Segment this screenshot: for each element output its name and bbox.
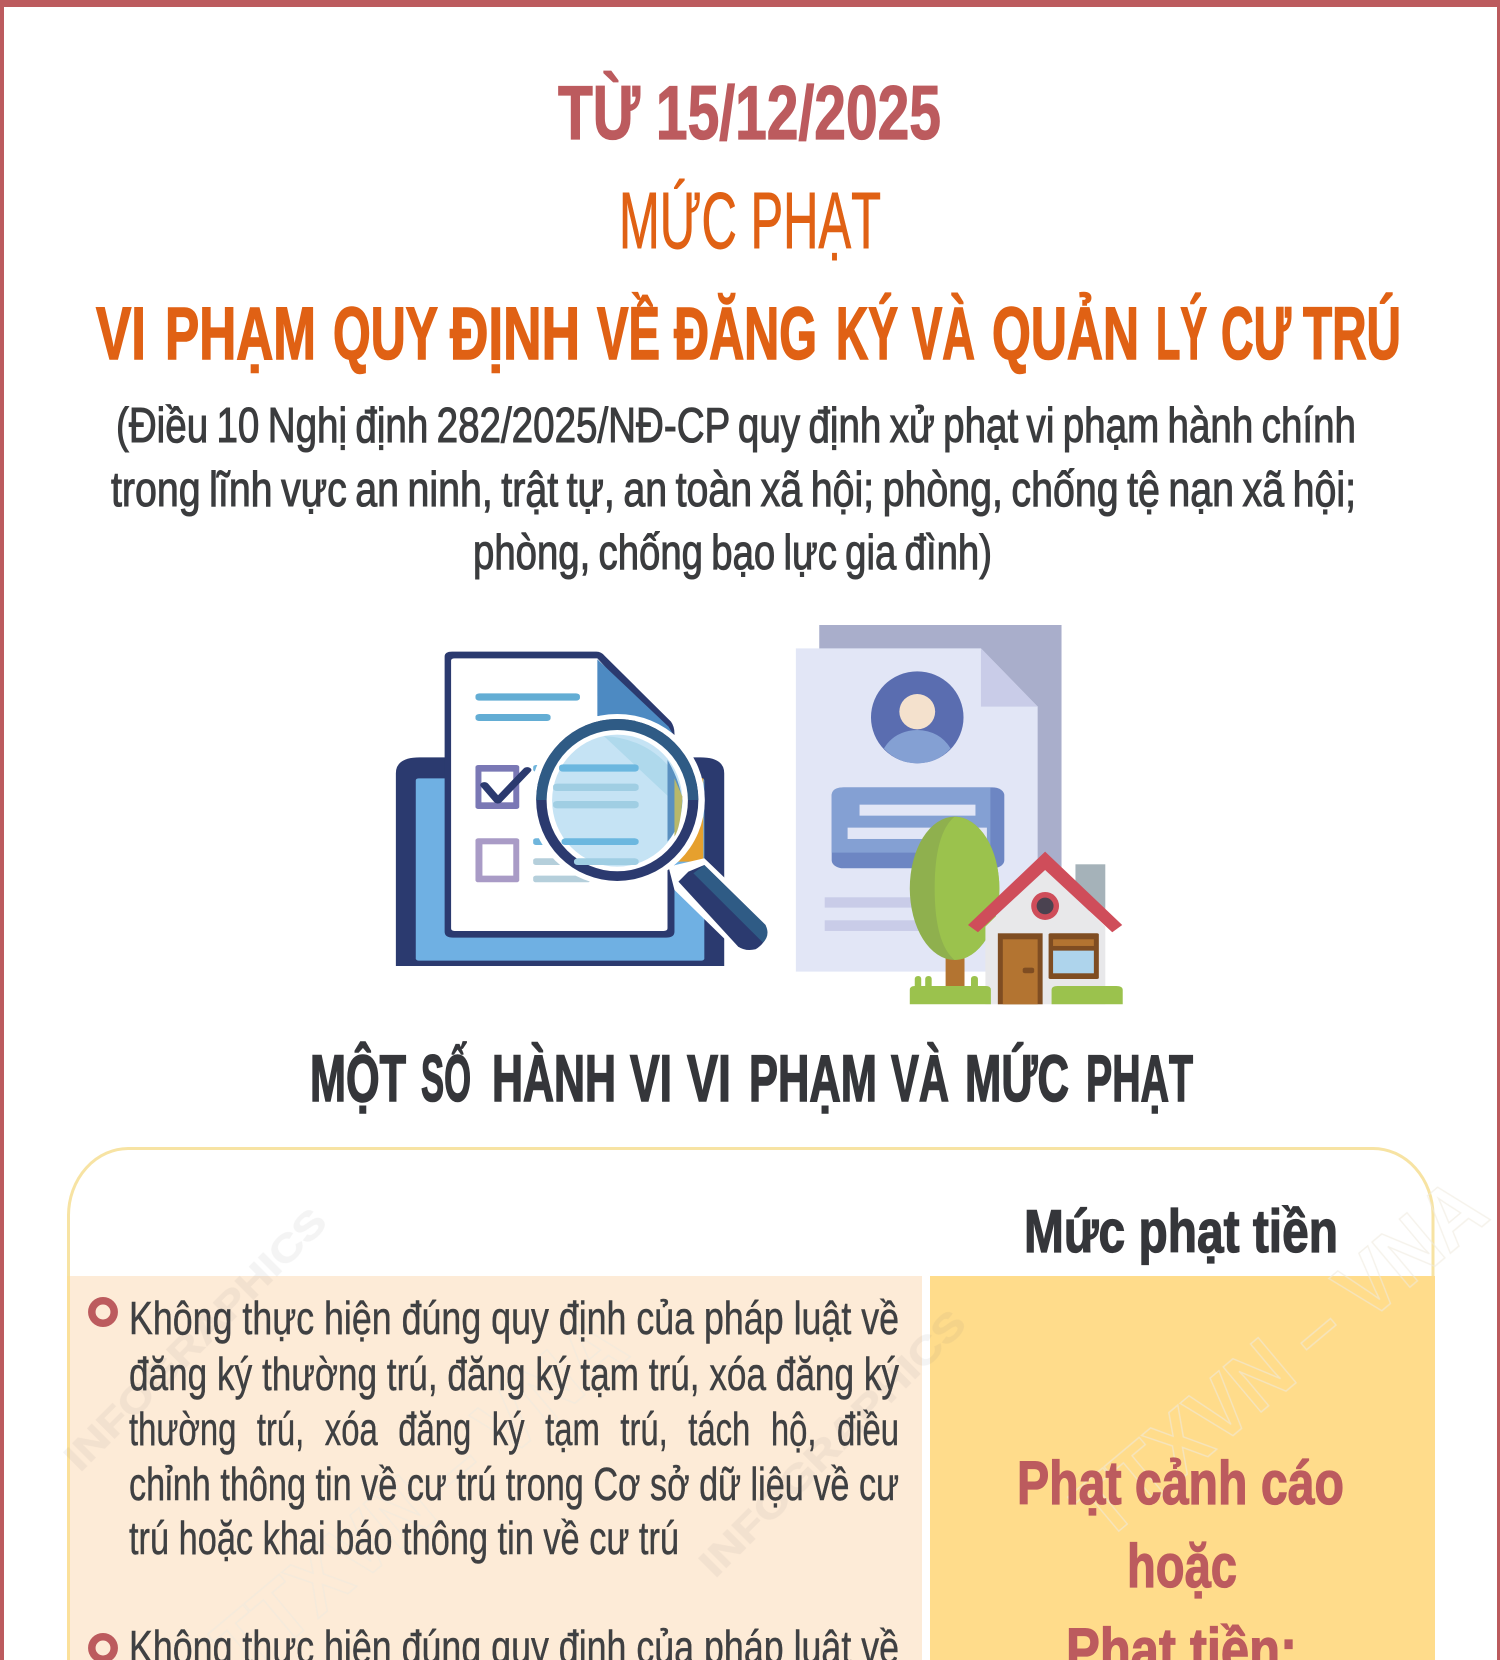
panel: violations and penalties table (57, 1148, 1500, 1660)
watermark: INFOGRAPHICS (692, 1303, 975, 1585)
watermark outline (196, 1160, 1500, 1660)
penalty text (1017, 1449, 1344, 1660)
section heading: VI (687, 1041, 731, 1115)
title: main heading: CƯ (1221, 292, 1291, 375)
column heading: fine level: Mức phạt tiền (1024, 1198, 1338, 1265)
title: main heading: VI (96, 292, 146, 375)
penalty text: Phạt cảnh cáo (1017, 1449, 1344, 1517)
violation text 1: chỉnh thông tin về cư trú trong Cơ sở dữ liệu về cư (129, 1458, 899, 1510)
subtitle: legal basis: phòng, chống bạo lực gia đình) (473, 526, 992, 580)
bullet icon (92, 1301, 114, 1323)
title: main heading: PHẠM (165, 292, 316, 375)
penalty text: hoặc (1127, 1532, 1237, 1600)
section heading: PHẠM (749, 1041, 877, 1115)
watermark: INFOGRAPHICS (57, 1201, 335, 1479)
section heading: HÀNH (492, 1041, 616, 1115)
title: main heading: ĐĂNG (674, 292, 817, 375)
title: main heading: QUY (333, 292, 438, 375)
section heading: VI (630, 1041, 672, 1115)
title: penalty level: MỨC PHẠT (619, 176, 881, 265)
title: main heading: KÝ (836, 292, 898, 375)
icon: checklist under magnifying glass (396, 652, 773, 966)
title: main heading (96, 292, 1401, 375)
title: main heading: ĐỊNH (450, 292, 580, 375)
title: main heading: LÝ (1156, 292, 1207, 375)
bullet icon (92, 1637, 114, 1659)
violation text 1: trú hoặc khai báo thông tin về cư trú (129, 1512, 679, 1564)
title: main heading: VỀ (597, 292, 660, 375)
violation text 1 (129, 1292, 899, 1564)
section heading: VÀ (891, 1041, 949, 1115)
section heading: MỘT (310, 1041, 406, 1115)
title: main heading: TRÚ (1303, 292, 1401, 375)
subtitle: legal basis (111, 399, 1356, 580)
violation text 1: đăng ký thường trú, đăng ký tạm trú, xóa đăng ký (129, 1348, 899, 1400)
watermark (57, 1201, 975, 1585)
section heading (310, 1041, 1193, 1115)
section heading: PHẠT (1086, 1041, 1193, 1115)
section heading: SỐ (421, 1041, 471, 1115)
violation text 1: Không thực hiện đúng quy định của pháp luật về (129, 1292, 899, 1344)
section heading: MỨC (965, 1041, 1069, 1115)
title: date: TỪ 15/12/2025 (558, 71, 941, 156)
title: main heading: QUẢN (992, 292, 1139, 375)
illustration: document review and residence (396, 625, 1123, 1004)
icon: residence document with house (796, 625, 1123, 1004)
title: main heading: VÀ (912, 292, 975, 375)
violation text 1: thường trú, xóa đăng ký tạm trú, tách hộ, điều (129, 1403, 899, 1455)
